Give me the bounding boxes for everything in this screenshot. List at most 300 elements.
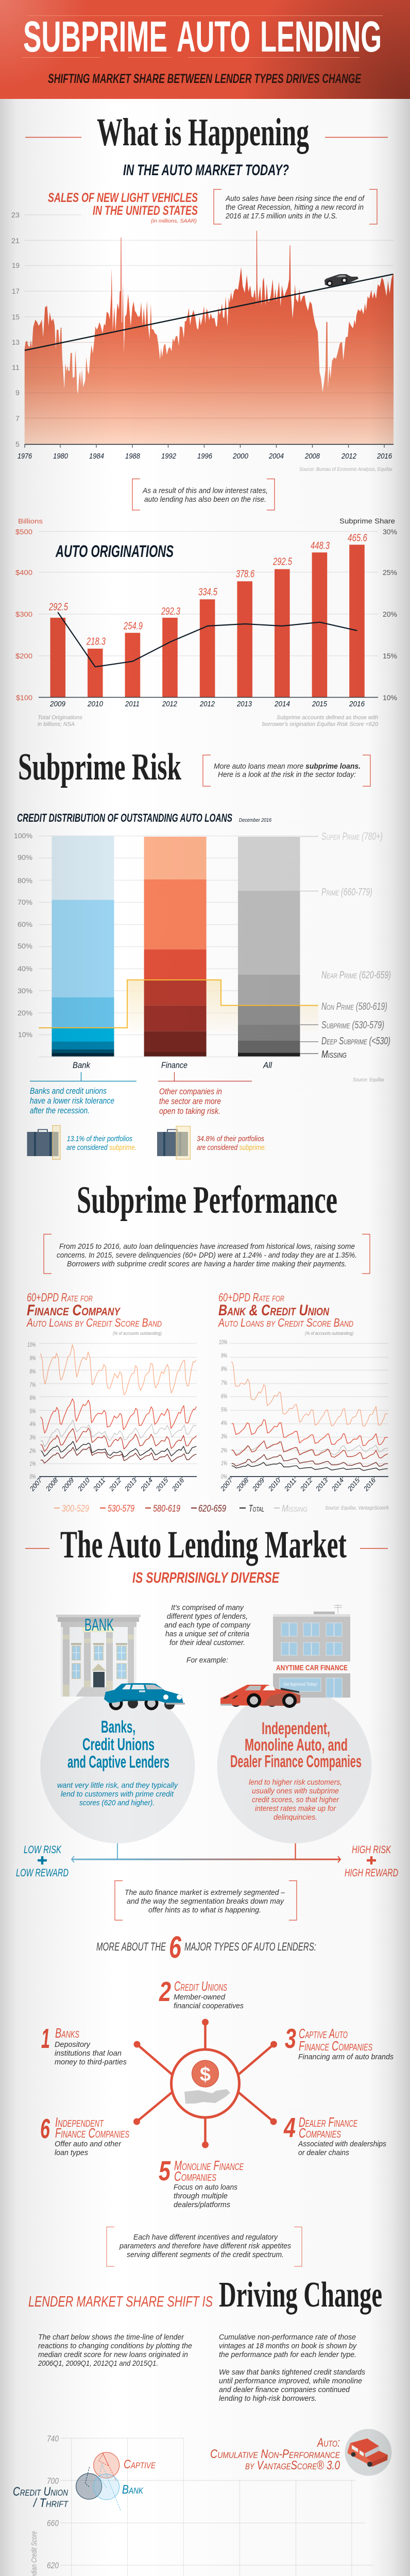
bar values: 254.9 <box>123 621 143 632</box>
bar labels <box>73 1060 272 1070</box>
area series <box>25 231 394 444</box>
subprime share line <box>58 612 357 667</box>
heading: six major types: MORE ABOUT THE <box>96 1940 166 1953</box>
description: want very little risk, and they typically <box>57 1781 178 1790</box>
bar values: 292.3 <box>161 606 180 617</box>
text: bank portfolio share <box>66 1134 136 1152</box>
footnotes: borrower's origination Equifax Risk Score <620 <box>262 721 379 727</box>
y labels: 100% <box>14 832 32 840</box>
sign: BANK <box>84 1615 114 1634</box>
title: and Captive Lenders <box>67 1752 169 1771</box>
lender type 4: dealer finance: Associated with dealerships <box>298 2140 386 2148</box>
x axis: 2007 <box>218 1476 234 1493</box>
x axis: 2000 <box>232 452 249 461</box>
x axis: 2016 <box>170 1476 186 1493</box>
y labels: 9% <box>30 1354 36 1362</box>
callout: segmented market: offer hints as to what is happening. <box>148 1906 261 1914</box>
chart title: Auto: <box>316 2436 340 2450</box>
icon: lender wheel with coin and hand <box>133 2019 277 2148</box>
intro text: has a unique set of criteria <box>165 1630 249 1638</box>
y labels: 2% <box>220 1447 227 1454</box>
note: other companies: open to taking risk. <box>159 1106 220 1116</box>
lender type 6: independent finance <box>40 2113 129 2157</box>
chart heading: 60+DPD Rate for <box>218 1291 284 1304</box>
y labels: 90% <box>18 853 32 861</box>
y labels: 20% <box>18 1009 32 1017</box>
text: finance portfolio share: are considered subprime. <box>197 1143 266 1152</box>
lender type 5: monoline finance: Companies <box>174 2168 216 2184</box>
text: chart explanation right: the performance path for each lender type. <box>219 2350 356 2359</box>
intro text: For example: <box>186 1656 228 1665</box>
x axis: 2013 <box>314 1476 330 1493</box>
windows <box>280 1623 342 1698</box>
year labels: 2012 <box>199 700 215 708</box>
bubble: credit union and thrift: / Thrift <box>32 2496 69 2510</box>
lender type 5: monoline finance: Focus on auto loans <box>174 2183 237 2192</box>
low risk label: LOW REWARD <box>16 1867 69 1879</box>
x axis: 2014 <box>330 1477 345 1493</box>
y labels: 0% <box>30 1473 36 1480</box>
door <box>92 1664 106 1671</box>
y labels: 6% <box>221 1393 227 1400</box>
text: chart explanation left: The chart below shows the time-line of lender <box>38 2333 184 2342</box>
section: auto lending market <box>25 1523 388 1665</box>
footnotes: Total Originations <box>38 715 83 721</box>
y labels: 8% <box>30 1368 36 1375</box>
y labels: 10% <box>18 1030 32 1039</box>
icon: bank building <box>56 1615 141 1697</box>
bubble: credit union and thrift <box>13 2467 102 2510</box>
lender type 5: monoline finance: 5 <box>159 2156 171 2187</box>
x axis: 2010 <box>76 1476 92 1493</box>
heading: six major types: MAJOR TYPES OF AUTO LENDERS: <box>184 1940 316 1953</box>
y labels: 3% <box>30 1434 36 1441</box>
bar values: 465.6 <box>348 533 368 544</box>
y labels: 620 <box>47 2561 59 2570</box>
text: chart explanation left: reactions to changing conditions by plotting the <box>38 2342 192 2350</box>
y labels: 700 <box>47 2476 59 2486</box>
y labels: 6% <box>30 1394 36 1401</box>
y labels: 7% <box>221 1379 227 1386</box>
lender type 3: captive auto finance <box>285 2023 394 2061</box>
bar values: 378.6 <box>236 569 255 580</box>
x axis <box>218 1476 388 1493</box>
section: what is happening <box>25 111 388 179</box>
bar values: 292.5 <box>48 601 69 613</box>
callout: different incentives <box>107 2227 302 2266</box>
text: chart explanation left: median credit score for new loans originated in <box>38 2350 188 2359</box>
y axis labels: 5 <box>15 440 20 448</box>
chart title: IN THE UNITED STATES <box>93 204 198 218</box>
bar values: 334.5 <box>198 587 218 598</box>
note: banks and credit unions: Banks and credit unions <box>30 1086 107 1096</box>
y labels: 740 <box>47 2434 59 2444</box>
right axis: 30% <box>383 528 397 536</box>
bar labels: Bank <box>73 1060 91 1070</box>
y labels: 80% <box>18 876 32 885</box>
legend labels: Prime (660-779) <box>321 887 372 898</box>
x axis: 1984 <box>89 452 104 461</box>
coin <box>192 2060 218 2087</box>
lender type 3: captive auto finance: 3 <box>285 2023 296 2054</box>
callout: concerns. In 2015, severe delinquencies (60+ DPD) were at 1.24% - and today they are at 1.35%. <box>57 1251 357 1260</box>
y labels: 50% <box>18 942 32 950</box>
legend: credit score bands: Total <box>249 1503 264 1514</box>
chart heading: Finance Company <box>27 1302 121 1319</box>
y labels: 4% <box>30 1420 36 1428</box>
y axis labels: 13 <box>12 338 20 346</box>
chart: auto originations <box>15 517 397 727</box>
chart: credit distribution: December 2016 <box>239 817 271 823</box>
y labels: 70% <box>18 898 32 906</box>
right axis: 25% <box>383 568 397 577</box>
bar: bank <box>52 836 114 1056</box>
chart title: AUTO ORIGINATIONS <box>55 542 174 561</box>
y labels: 4% <box>221 1419 227 1427</box>
y labels: 3% <box>221 1433 227 1440</box>
icon: finance company building <box>273 1604 350 1698</box>
low risk label: LOW RISK <box>24 1844 62 1856</box>
title <box>230 1719 362 1771</box>
y labels: 10% <box>27 1341 36 1348</box>
lender type 4: dealer finance: Dealer Finance <box>299 2114 358 2130</box>
left axis: $100 <box>16 693 32 702</box>
title: Independent, <box>262 1719 330 1738</box>
y labels: 2% <box>29 1447 36 1454</box>
year labels: 2013 <box>236 700 252 708</box>
x axis: 2011 <box>91 1477 107 1493</box>
left axis: $500 <box>15 528 32 536</box>
x axis: 2014 <box>139 1477 154 1493</box>
title: Banks, <box>101 1717 135 1736</box>
x axis: 2012 <box>298 1476 314 1493</box>
lender type 6: independent finance: Finance Companies <box>55 2125 129 2141</box>
legend: credit score bands: 530-579 <box>108 1503 134 1514</box>
callout: auto sales: 2016 at 17.5 million units in the U.S. <box>225 212 337 221</box>
x axis: 2016 <box>362 1476 378 1493</box>
circle: banks, credit unions and captive lenders <box>40 1689 195 1843</box>
left axis <box>15 528 32 702</box>
lender type 1: banks: Depository <box>55 2040 91 2049</box>
x axis: 1976 <box>18 452 32 461</box>
icon: finance company building: Get Approved Today! <box>283 1682 317 1687</box>
y labels: 60% <box>18 920 32 928</box>
y labels: 660 <box>47 2518 59 2528</box>
callout: auto sales: the Great Recession, hitting a new record in <box>226 203 364 212</box>
y labels: 30% <box>18 987 32 995</box>
text: finance portfolio share: 34.8% of their portfolios <box>197 1134 264 1143</box>
lender type 2: credit unions <box>159 1976 244 2010</box>
text: finance portfolio share <box>197 1134 266 1152</box>
bar: all <box>238 837 300 1056</box>
bubble: credit union and thrift: Credit Union <box>13 2485 69 2499</box>
callout: Borrowers with subprime credit scores are having a harder time making their payments. <box>67 1260 347 1268</box>
heading: six major types: 6 <box>169 1930 181 1964</box>
section heading: driving change <box>28 2275 382 2315</box>
text: chart explanation right: lending to high-risk borrowers. <box>219 2394 317 2403</box>
lender type 1: banks: money to third-parties <box>55 2058 127 2066</box>
section: subprime performance <box>44 1179 370 1274</box>
x axis <box>18 444 394 461</box>
lender type 5: monoline finance: through multiple <box>174 2192 228 2200</box>
lender type 4: dealer finance: or dealer chains <box>298 2148 349 2157</box>
chart title <box>48 191 198 224</box>
text: chart explanation left <box>38 2333 192 2368</box>
lender type 5: monoline finance: Monoline Finance <box>174 2158 244 2173</box>
legend: credit score bands <box>54 1503 389 1514</box>
chart title: Cumulative Non-Performance <box>210 2447 340 2461</box>
x axis: 1980 <box>53 452 69 461</box>
lender type 2: credit unions: Credit Unions <box>174 1978 227 1994</box>
chart: finance company delinquency <box>26 1291 197 1493</box>
bar labels: All <box>263 1060 272 1070</box>
intro text: It's comprised of many <box>171 1603 244 1612</box>
y labels: 5% <box>30 1408 36 1415</box>
intro text <box>164 1603 251 1665</box>
icon: finance briefcase <box>157 1126 191 1159</box>
left axis: $300 <box>15 610 32 618</box>
text: bank portfolio share: 13.1% of their portfolios <box>67 1134 132 1143</box>
y axis labels: 23 <box>11 211 20 219</box>
callout: different incentives: serving different segments of the credit spectrum. <box>127 2250 284 2259</box>
steps <box>76 1687 107 1697</box>
y labels: 1% <box>221 1460 227 1467</box>
chart title: (in millions, SAAR) <box>151 218 197 224</box>
subprime threshold line <box>39 980 318 1028</box>
x axis: 2016 <box>377 452 392 461</box>
icon: blue car <box>104 1683 185 1710</box>
legend labels: Super Prime (780+) <box>321 831 383 842</box>
right axis <box>383 528 397 702</box>
y labels <box>219 1338 228 1480</box>
description: usually ones with subprime <box>252 1787 339 1795</box>
description <box>57 1781 178 1807</box>
bar values: 218.3 <box>86 636 106 648</box>
title: Credit Unions <box>82 1735 155 1754</box>
lender type 1: banks: 1 <box>41 2023 50 2054</box>
footnotes: in billions; NSA <box>38 721 75 727</box>
year labels <box>49 700 365 708</box>
hand <box>184 2089 230 2104</box>
bar labels: Finance <box>161 1060 187 1070</box>
year labels: 2014 <box>274 700 290 708</box>
callout: different incentives: Each have different incentives and regulatory <box>133 2233 278 2242</box>
y labels <box>27 1341 36 1480</box>
coin: $ <box>200 2064 211 2086</box>
description: lend to customers with prime credit <box>61 1790 174 1799</box>
note: banks and credit unions: have a lower risk tolerance <box>30 1096 114 1106</box>
y labels: 0% <box>221 1473 227 1480</box>
lender type 2: credit unions: financial cooperatives <box>174 2002 244 2010</box>
note: other companies <box>157 1072 266 1159</box>
callout: segmented market <box>115 1880 297 1920</box>
chart: sales of new light vehicles <box>11 190 394 472</box>
lender type 6: independent finance: Independent <box>55 2114 104 2130</box>
legend: credit score bands: 620-659 <box>198 1503 226 1514</box>
trend line <box>25 274 393 350</box>
note: other companies: the sector are more <box>159 1096 221 1106</box>
description: lend to higher risk customers, <box>249 1778 342 1787</box>
chart heading <box>217 1291 353 1336</box>
legend: credit score bands: 580-619 <box>153 1503 180 1514</box>
lines <box>41 1345 196 1463</box>
text: chart explanation right: and dealer finance companies continued <box>219 2385 350 2394</box>
callout: segmented market: and the way the segmentation breaks down may <box>127 1897 284 1906</box>
year labels: 2015 <box>312 700 328 708</box>
callout <box>203 755 370 786</box>
note: banks and credit unions <box>27 1072 136 1159</box>
chart heading: (% of accounts outstanding) <box>113 1331 162 1336</box>
chart title: by VantageScore® 3.0 <box>245 2459 340 2472</box>
subheading: IS SURPRISINGLY DIVERSE <box>132 1570 280 1586</box>
circle: independent, monoline and dealer finance <box>217 1689 372 1843</box>
heading: Subprime Risk <box>18 746 182 788</box>
description: credit scores, so that higher <box>252 1795 339 1804</box>
chart: bank and credit union delinquency <box>217 1291 388 1493</box>
right axis: 15% <box>383 652 397 660</box>
y axis labels: 17 <box>12 287 20 295</box>
lender type 1: banks: Banks <box>55 2025 79 2041</box>
x axis: 2009 <box>250 1477 266 1493</box>
x axis: 2008 <box>44 1476 60 1493</box>
x axis: 2012 <box>107 1476 123 1493</box>
callout: auto sales <box>214 190 377 224</box>
title: Monoline Auto, and <box>245 1735 348 1754</box>
lender type 6: independent finance: 6 <box>40 2113 50 2144</box>
y axis labels: 9 <box>15 388 20 397</box>
year labels: 2009 <box>49 700 66 708</box>
description: delinquincies. <box>274 1813 317 1822</box>
high risk label: HIGH RISK <box>352 1844 391 1856</box>
x axis: 2010 <box>266 1476 282 1493</box>
y labels: 40% <box>18 964 32 973</box>
bar values <box>48 533 368 648</box>
callout: auto lending on the rise: auto lending has also been on the rise. <box>144 495 266 504</box>
callout <box>44 1234 370 1274</box>
bubble: captive <box>94 2452 156 2481</box>
text: chart explanation right <box>219 2333 365 2403</box>
arrow <box>72 1856 340 1862</box>
lender type 5: monoline finance: dealers/platforms <box>174 2200 230 2209</box>
x axis: 1992 <box>161 452 177 461</box>
chart title: CREDIT DISTRIBUTION OF OUTSTANDING AUTO LOANS <box>17 811 232 824</box>
x axis: 1988 <box>125 452 141 461</box>
year labels: 2010 <box>87 700 104 708</box>
section heading: driving change: LENDER MARKET SHARE SHIFT IS <box>28 2294 213 2310</box>
right axis: 20% <box>383 610 397 618</box>
callout: More auto loans mean more subprime loans. <box>214 762 361 771</box>
text: chart explanation right: We saw that banks tightened credit standards <box>219 2368 365 2377</box>
heading: six major types <box>96 1930 316 1964</box>
lines <box>232 1361 388 1470</box>
subheading: IN THE AUTO MARKET TODAY? <box>123 162 289 179</box>
note: banks and credit unions: after the recession. <box>30 1106 90 1115</box>
x axis: 2015 <box>346 1476 362 1493</box>
title <box>23 12 382 61</box>
low risk label <box>16 1844 69 1879</box>
chart heading: Auto Loans by Credit Score Band <box>26 1316 162 1329</box>
legend labels: Missing <box>321 1049 347 1060</box>
intro text: for their ideal customer. <box>169 1638 245 1647</box>
text: bank portfolio share: are considered subprime. <box>66 1143 136 1152</box>
y axis labels: 7 <box>15 414 20 422</box>
chart: median credit score vs non-performance <box>13 2429 391 2576</box>
title <box>67 1717 169 1771</box>
bar: finance <box>144 837 207 1056</box>
note: other companies: Other companies in <box>159 1087 222 1096</box>
chart heading: 60+DPD Rate for <box>27 1291 93 1304</box>
lender type 2: credit unions: Member-owned <box>174 1993 226 2002</box>
year labels: 2011 <box>125 700 140 708</box>
x axis: 2004 <box>268 452 284 461</box>
chart title: SALES OF NEW LIGHT VEHICLES <box>48 191 198 205</box>
legend labels: Subprime (530-579) <box>321 1020 384 1031</box>
axis titles: Billions <box>18 517 43 525</box>
bubble: bank <box>94 2464 144 2511</box>
source note: Source: Bureau of Economic Analysis, Equifax <box>299 467 393 472</box>
y labels <box>47 2434 59 2576</box>
bubble: captive: Captive <box>124 2458 156 2471</box>
chart heading: Bank & Credit Union <box>218 1302 330 1319</box>
left axis: $200 <box>15 652 32 660</box>
text: chart explanation right: vintages at 18 months on book is shown by <box>219 2342 357 2350</box>
lender type 4: dealer finance <box>283 2112 386 2157</box>
icon: bank briefcase <box>27 1125 60 1159</box>
y axis labels: 11 <box>12 363 20 371</box>
intro text: different types of lenders, <box>167 1612 248 1621</box>
callout: auto sales: Auto sales have been rising since the end of <box>225 194 365 203</box>
x axis: 2007 <box>28 1476 44 1493</box>
x axis: 2008 <box>304 452 320 461</box>
lender type 1: banks: institutions that loan <box>55 2049 122 2058</box>
lender type 3: captive auto finance: Captive Auto <box>299 2026 348 2041</box>
subprime highlight band <box>127 980 318 1031</box>
title: SUBPRIME <box>23 12 167 61</box>
x axis: 2015 <box>154 1476 170 1493</box>
text: chart explanation left: 2006Q1, 2009Q1, 2012Q1 and 2015Q1. <box>38 2359 158 2368</box>
x axis: 1996 <box>197 452 213 461</box>
chart: credit distribution <box>14 811 391 1083</box>
x axis: 2013 <box>123 1476 139 1493</box>
text: chart explanation right: until performance improved, while monoline <box>219 2377 362 2385</box>
lender type 2: credit unions: 2 <box>159 1976 171 2007</box>
risk spectrum <box>16 1843 398 1879</box>
bar values: 448.3 <box>311 540 330 552</box>
lender type 5: monoline finance <box>159 2156 244 2209</box>
chart heading: Auto Loans by Credit Score Band <box>217 1316 353 1329</box>
y labels: 5% <box>221 1406 227 1413</box>
y labels: 8% <box>221 1365 227 1372</box>
x axis: 2012 <box>341 452 357 461</box>
lender type 4: dealer finance: Companies <box>299 2125 341 2141</box>
y axis labels: 15 <box>12 313 20 321</box>
callout: different incentives: parameters and therefore have different risk appetites <box>119 2242 291 2250</box>
description: interest rates make up for <box>255 1804 336 1813</box>
section: subprime risk <box>18 746 370 788</box>
intro text: and each type of company <box>164 1621 251 1630</box>
description: scores (620 and higher). <box>79 1799 155 1807</box>
icon: red jeep in circle <box>345 2429 391 2476</box>
x axis: 2009 <box>60 1477 75 1493</box>
y axis labels <box>11 211 20 448</box>
chart title <box>210 2436 340 2472</box>
lender type 6: independent finance: loan types <box>55 2148 88 2157</box>
lender type 1: banks <box>41 2023 127 2066</box>
callout: segmented market: The auto finance market is extremely segmented – <box>125 1888 285 1897</box>
left axis: $400 <box>15 568 32 577</box>
legend: credit score bands: Missing <box>282 1503 308 1514</box>
lender type 3: captive auto finance: Finance Companies <box>299 2038 372 2054</box>
